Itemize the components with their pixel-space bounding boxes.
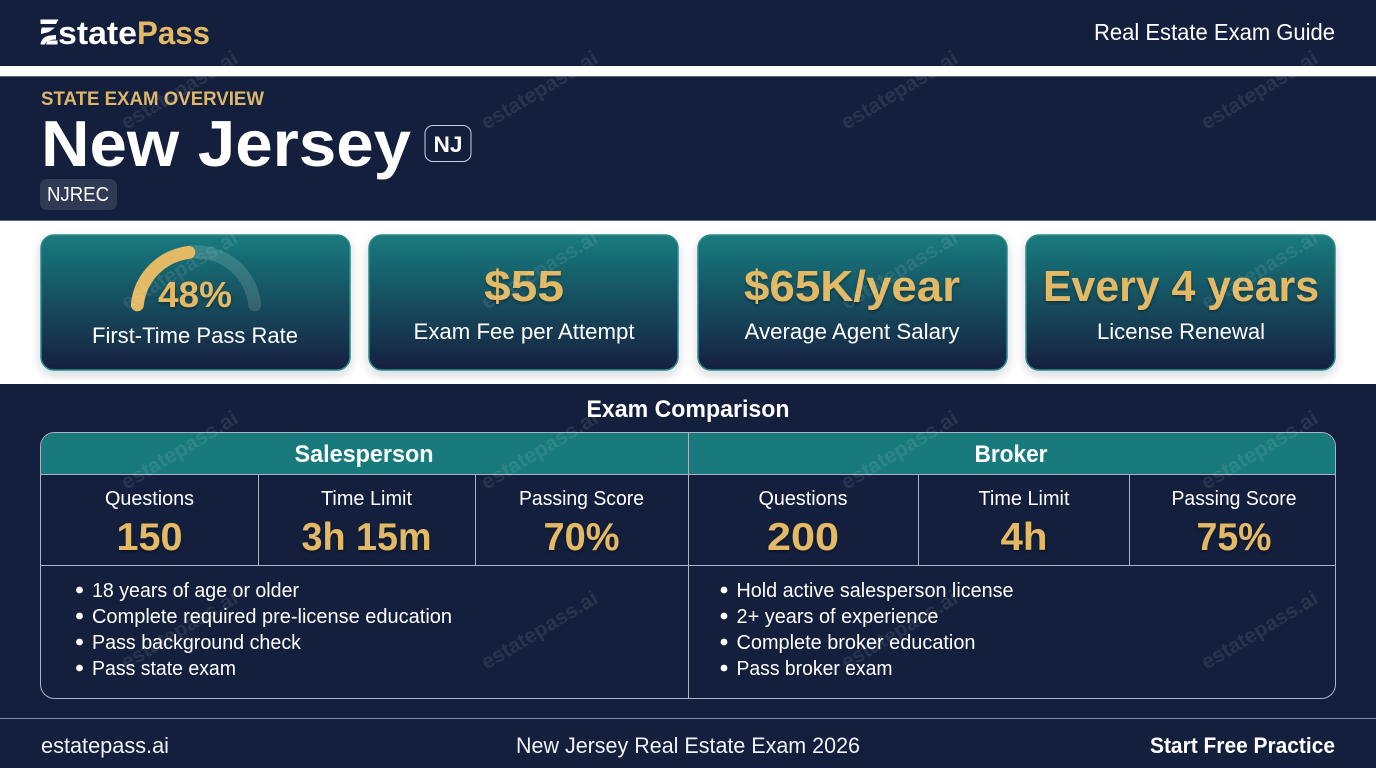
broker metrics: Passing Score	[1172, 488, 1296, 510]
watermarks: estatepass.ai	[477, 47, 602, 134]
watermarks: estatepass.ai	[1197, 227, 1322, 314]
watermarks: estatepass.ai	[837, 227, 962, 314]
footer call to action: Start Free Practice	[1150, 733, 1335, 758]
salesperson metrics: 150	[116, 516, 182, 559]
card: renewal: License Renewal	[1097, 319, 1265, 344]
panel: exam comparison	[0, 384, 1376, 768]
broker requirements: Pass broker exam	[736, 658, 892, 680]
comparison table	[40, 432, 1336, 698]
state hero band	[0, 76, 1376, 221]
state name: New Jersey	[41, 107, 411, 180]
salesperson metrics: Time Limit	[321, 488, 412, 510]
watermarks: estatepass.ai	[1197, 47, 1322, 134]
logo: Pass	[137, 15, 210, 51]
salesperson requirements: Complete required pre-license education	[92, 606, 452, 628]
salesperson metrics	[105, 488, 644, 559]
broker metrics: Time Limit	[978, 488, 1070, 510]
column header: salesperson: Salesperson	[294, 441, 434, 468]
card: pass rate	[41, 235, 350, 370]
card: renewal: Every 4 years	[1043, 262, 1319, 311]
header bar	[0, 0, 1376, 66]
watermarks: estatepass.ai	[117, 407, 242, 494]
footer	[0, 718, 1376, 758]
column header: broker: Broker	[974, 441, 1048, 468]
footer site: estatepass.ai	[41, 733, 169, 758]
broker requirements: 2+ years of experience	[736, 606, 938, 628]
broker requirements: Complete broker education	[736, 632, 976, 654]
watermarks: estatepass.ai	[117, 227, 242, 314]
salesperson requirements: 18 years of age or older	[92, 580, 299, 602]
gauge	[137, 252, 255, 305]
salesperson metrics: 70%	[544, 516, 620, 559]
card: exam fee: $55	[484, 262, 564, 311]
salesperson metrics: Passing Score	[519, 488, 644, 510]
card: salary: $65K/year	[744, 262, 960, 311]
eyebrow label: STATE EXAM OVERVIEW	[41, 88, 265, 110]
broker metrics: 4h	[1000, 516, 1048, 559]
salesperson requirements: Pass state exam	[92, 658, 236, 680]
watermarks: estatepass.ai	[117, 47, 242, 134]
card: pass rate: 48%	[158, 274, 232, 315]
broker requirements	[721, 580, 1014, 680]
footer title: New Jersey Real Estate Exam 2026	[516, 733, 860, 758]
agency badge	[40, 179, 117, 210]
watermarks: estatepass.ai	[477, 227, 602, 314]
header tagline: Real Estate Exam Guide	[1094, 19, 1335, 45]
watermarks: estatepass.ai	[837, 47, 962, 134]
watermarks: estatepass.ai	[1197, 587, 1322, 674]
logo	[40, 15, 210, 51]
salesperson requirements	[76, 580, 452, 680]
broker metrics: Questions	[758, 488, 848, 510]
agency badge: NJREC	[47, 184, 109, 206]
card: pass rate: First-Time Pass Rate	[92, 323, 298, 348]
salesperson metrics: Questions	[105, 488, 194, 510]
salesperson metrics: 3h 15m	[302, 516, 432, 559]
watermarks: estatepass.ai	[117, 587, 242, 674]
comparison heading: Exam Comparison	[586, 396, 790, 423]
watermarks: estatepass.ai	[1197, 407, 1322, 494]
watermarks: estatepass.ai	[477, 587, 602, 674]
watermarks: estatepass.ai	[837, 587, 962, 674]
state code badge	[425, 126, 471, 162]
card: exam fee: Exam Fee per Attempt	[414, 319, 634, 344]
broker metrics: 75%	[1196, 516, 1272, 559]
card: renewal	[1026, 235, 1335, 370]
card: exam fee	[369, 235, 678, 370]
panel: stat cards	[41, 235, 1335, 370]
watermarks: estatepass.ai	[477, 407, 602, 494]
watermarks: estatepass.ai	[837, 407, 962, 494]
card: salary: Average Agent Salary	[744, 319, 960, 344]
card: salary	[698, 235, 1007, 370]
broker requirements: Hold active salesperson license	[736, 580, 1014, 602]
broker metrics: 200	[767, 516, 839, 559]
salesperson requirements: Pass background check	[92, 632, 302, 654]
watermarks	[117, 47, 1322, 674]
broker metrics	[758, 488, 1296, 559]
state code badge: NJ	[434, 132, 462, 157]
logo: state	[58, 15, 137, 51]
